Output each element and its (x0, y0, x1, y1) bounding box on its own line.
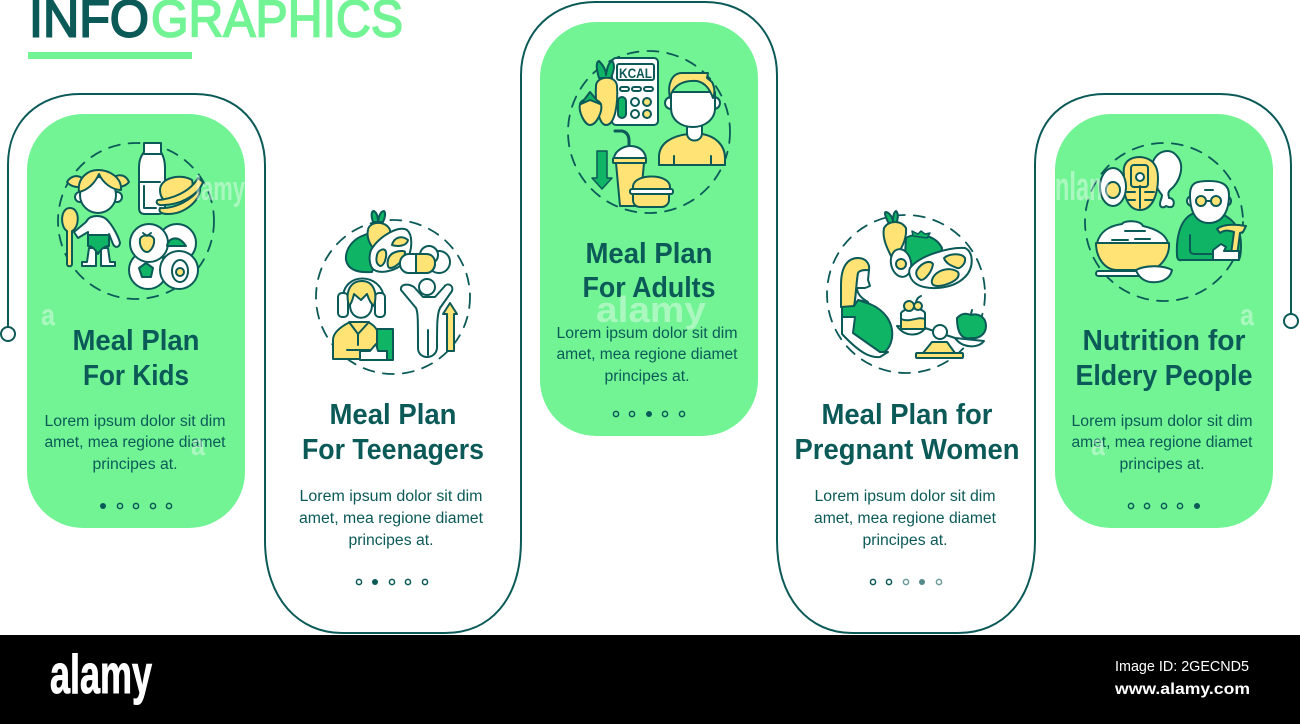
heading (302, 399, 484, 466)
heading: Meal Plan (330, 399, 456, 431)
heading (72, 325, 200, 392)
body text: amet, mea regione diamet (814, 510, 997, 527)
icon: adult with calories (568, 51, 730, 213)
heading: INFOGRAPHICS (28, 0, 403, 59)
watermarks: nlam (1055, 165, 1110, 209)
panel: elderly (1055, 114, 1273, 528)
watermarks: lamy (195, 170, 245, 208)
icon: teenager with food (316, 211, 470, 374)
pagination dots (356, 579, 428, 585)
heading: Meal Plan (72, 325, 200, 357)
watermarks (41, 165, 1254, 462)
heading (582, 238, 716, 304)
body text: amet, mea regione diamet (556, 346, 738, 363)
watermarks: a (41, 299, 55, 332)
body text: Lorem ipsum dolor sit dim (44, 413, 226, 430)
body text (44, 413, 226, 473)
icon: adult with calories: KCAL (619, 65, 652, 81)
panel: teenagers (299, 211, 484, 585)
footer bar: alamy (50, 643, 152, 705)
heading (1076, 325, 1252, 392)
watermarks: alamy (596, 289, 706, 330)
heading: For Adults (582, 272, 716, 304)
footer bar: Image ID: 2GECND5 (1115, 658, 1249, 675)
watermarks: a (191, 429, 205, 462)
body text: Lorem ipsum dolor sit dim (300, 488, 482, 505)
watermarks: a (1091, 429, 1105, 462)
body text: principes at. (604, 368, 690, 385)
body text: amet, mea regione diamet (44, 434, 226, 451)
body text (1072, 413, 1253, 473)
body text (556, 325, 738, 385)
body text: principes at. (348, 532, 434, 549)
panel: pregnant women (794, 211, 1020, 585)
body text: amet, mea regione diamet (1072, 434, 1253, 451)
body text: principes at. (1120, 456, 1204, 473)
panel: kids (27, 114, 245, 528)
footer bar: www.alamy.com (1114, 681, 1250, 698)
body text: principes at. (862, 532, 948, 549)
pagination dots (100, 503, 172, 509)
watermarks: a (1240, 299, 1254, 332)
body text (814, 488, 997, 549)
heading: Eldery People (1076, 360, 1252, 392)
heading: Meal Plan for (822, 399, 992, 431)
heading (794, 399, 1020, 466)
body text: principes at. (92, 456, 178, 473)
heading: Meal Plan (586, 238, 712, 270)
panel: adults (540, 22, 758, 436)
heading: Pregnant Women (794, 434, 1020, 466)
icon: child with food (58, 143, 214, 299)
heading: For Teenagers (302, 434, 484, 466)
body text (299, 488, 484, 549)
pagination dots (1128, 503, 1200, 509)
footer bar (0, 635, 1300, 724)
pagination dots (613, 411, 685, 417)
pagination dots (870, 579, 942, 585)
body text: amet, mea regione diamet (299, 510, 484, 527)
icon: pregnant woman with food (827, 211, 986, 373)
body text: Lorem ipsum dolor sit dim (556, 325, 738, 342)
heading: For Kids (83, 360, 189, 392)
body text: Lorem ipsum dolor sit dim (1072, 413, 1252, 430)
icon: elderly man with food (1085, 143, 1246, 301)
heading: Nutrition for (1082, 325, 1246, 357)
body text: Lorem ipsum dolor sit dim (814, 488, 996, 505)
